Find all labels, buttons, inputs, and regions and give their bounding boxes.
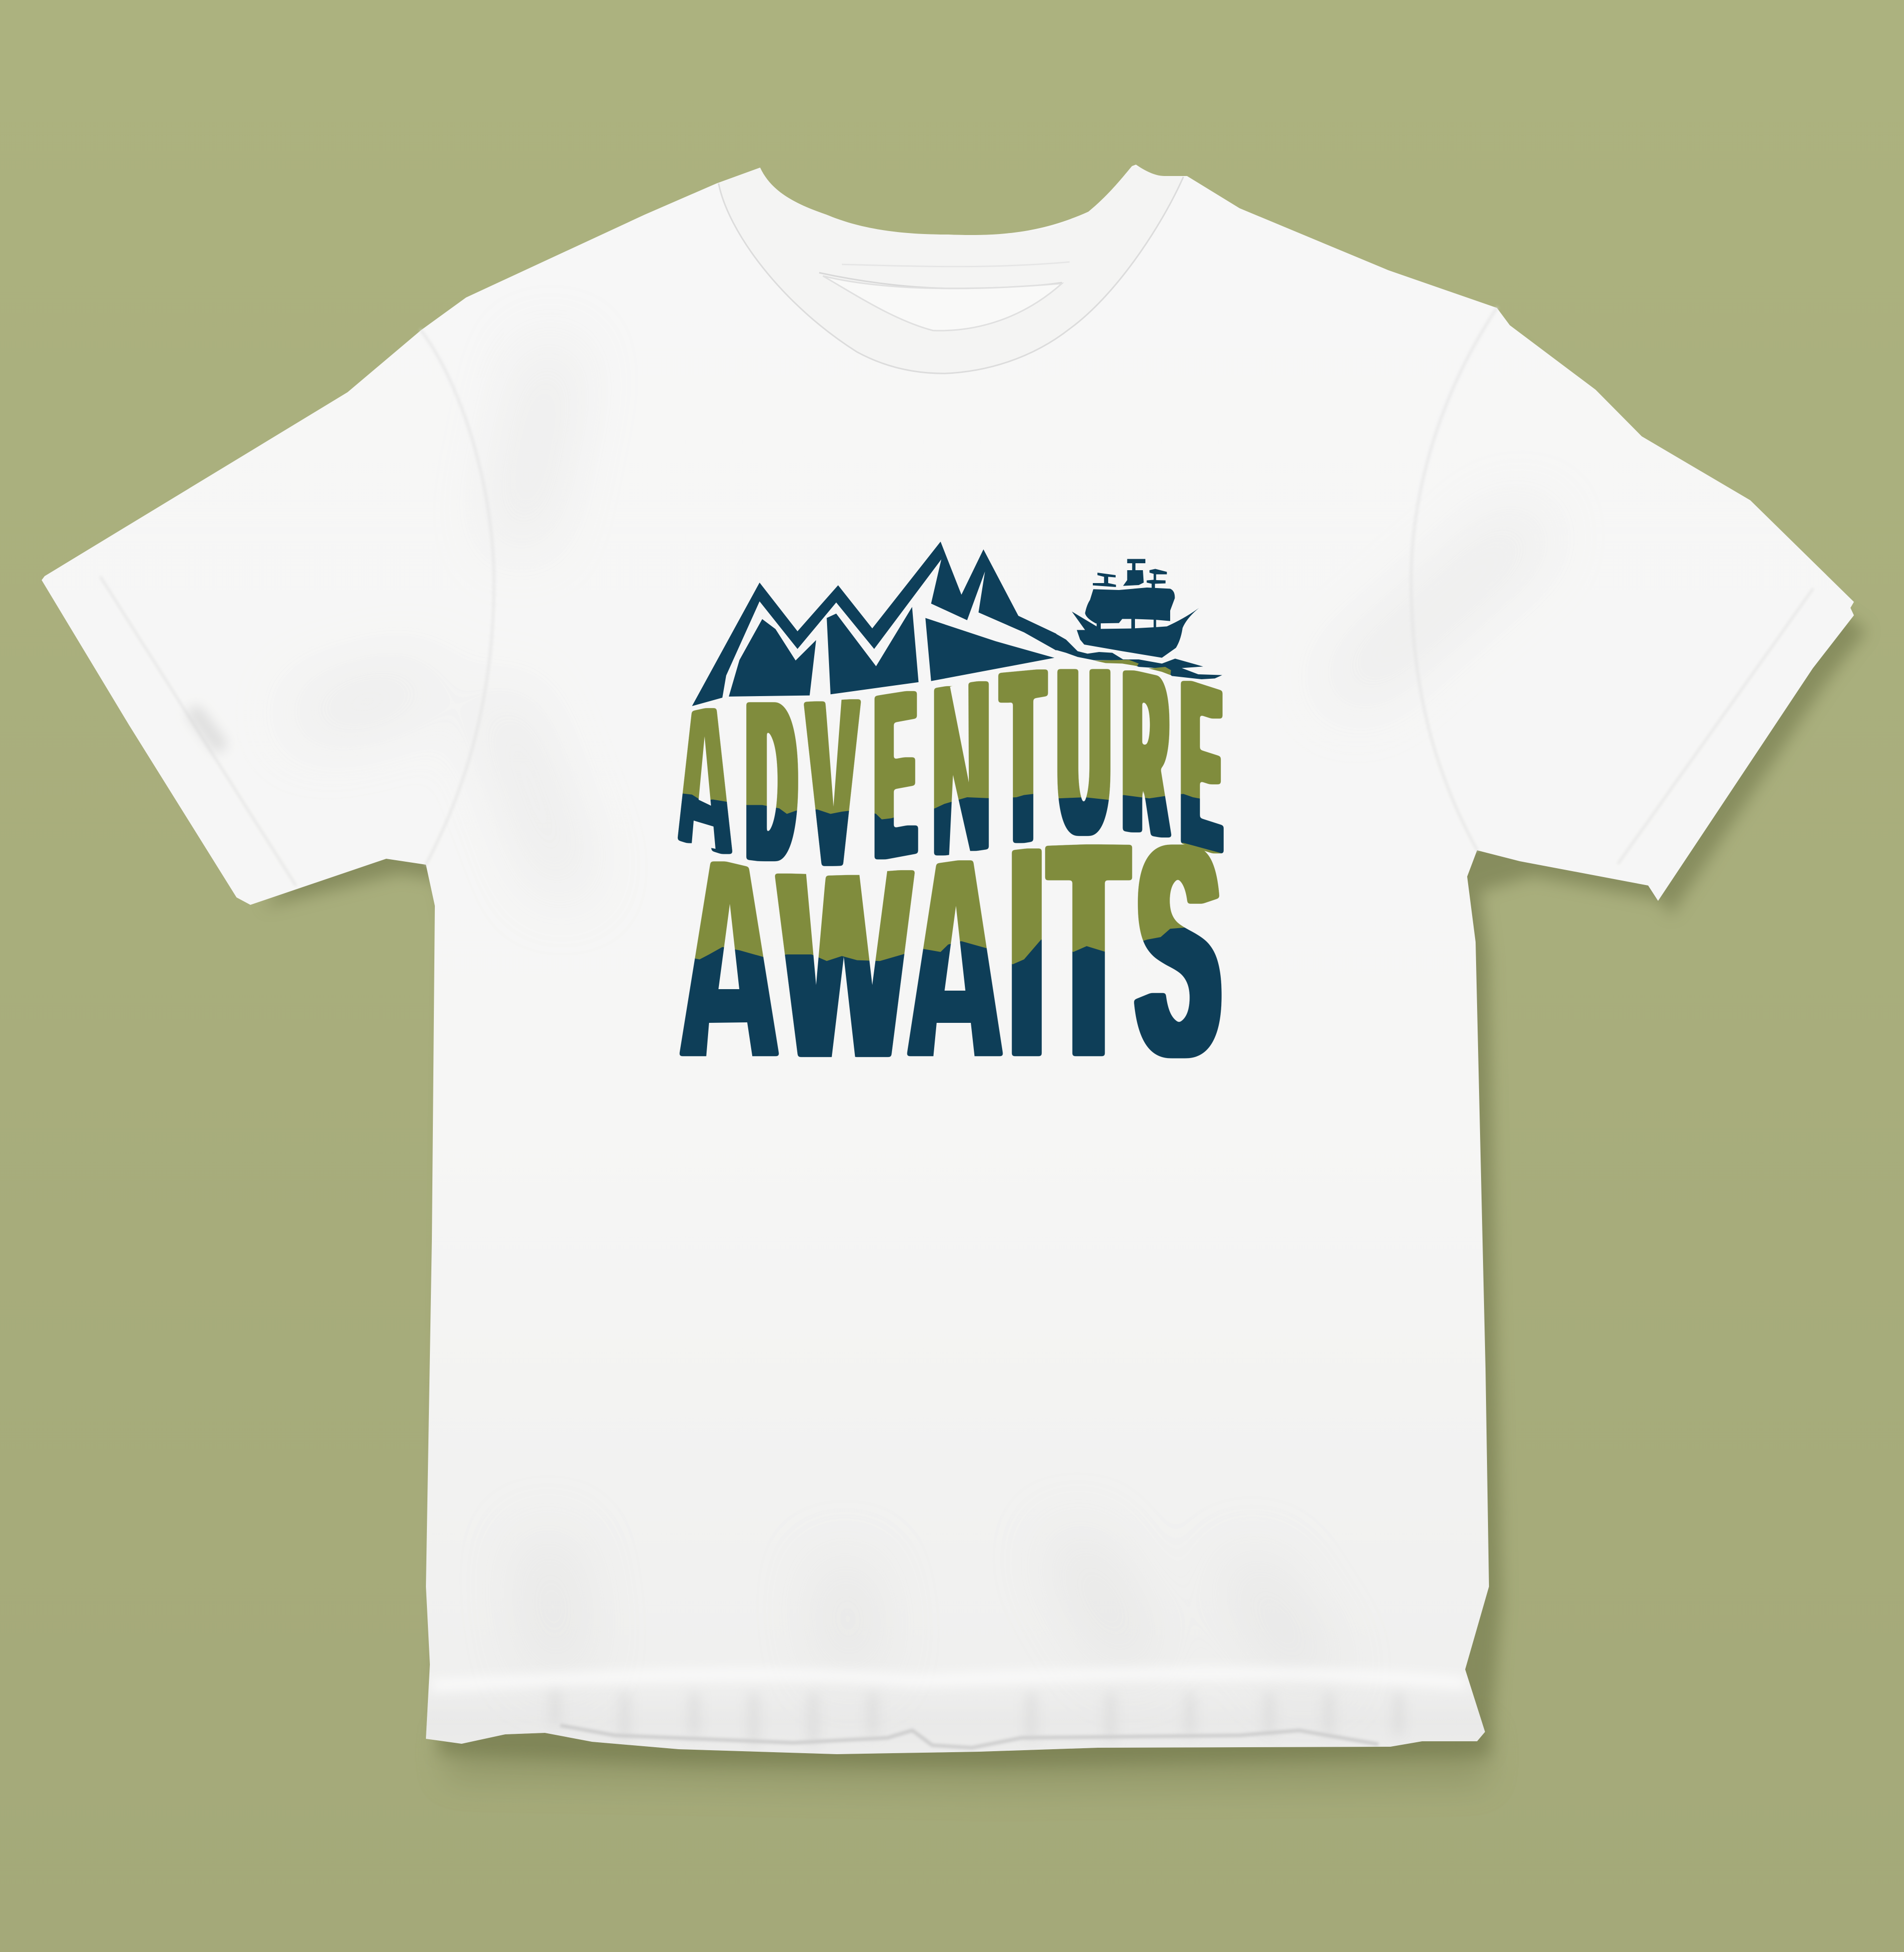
word: AWAITS: T [1051, 780, 1126, 1121]
word: ADVENTURE: U [1059, 617, 1109, 884]
word: AWAITS: I [1012, 783, 1041, 1120]
word: ADVENTURE: R [1124, 621, 1167, 887]
word: AWAITS [684, 780, 1219, 1121]
word: ADVENTURE: V [809, 649, 856, 917]
word: AWAITS: A [911, 796, 999, 1116]
ship and sea [1055, 559, 1222, 679]
mountains [692, 541, 1056, 706]
word: ADVENTURE: E [876, 641, 915, 909]
crossbars of the letter A [690, 796, 975, 1024]
olive upper tone over ADVENTURE [667, 627, 1229, 820]
word: ADVENTURE: D [747, 652, 795, 909]
word: ADVENTURE: E [1183, 630, 1220, 903]
olive upper tone over AWAITS [671, 840, 1229, 964]
word: AWAITS: W [781, 812, 909, 1114]
letter counters opened up [692, 682, 975, 1059]
shirt folds and shading [426, 1701, 1485, 1750]
word: ADVENTURE: A [680, 651, 729, 902]
word: ADVENTURE [680, 614, 1220, 917]
word: AWAITS: S [1138, 783, 1219, 1118]
crew-neck collar [718, 166, 1184, 373]
hem band with ribbed folds [431, 1674, 1465, 1748]
word: ADVENTURE: T [1003, 614, 1043, 897]
printed graphic: Adventure Awaits [677, 541, 1224, 1059]
word: ADVENTURE: N [935, 630, 988, 907]
two-tone wordmark [620, 614, 1264, 1121]
t-shirt body [42, 165, 1854, 1754]
sleeve and armhole seams [101, 308, 1813, 885]
shirt cast shadow [162, 253, 1867, 1790]
word: AWAITS: A [684, 798, 775, 1116]
